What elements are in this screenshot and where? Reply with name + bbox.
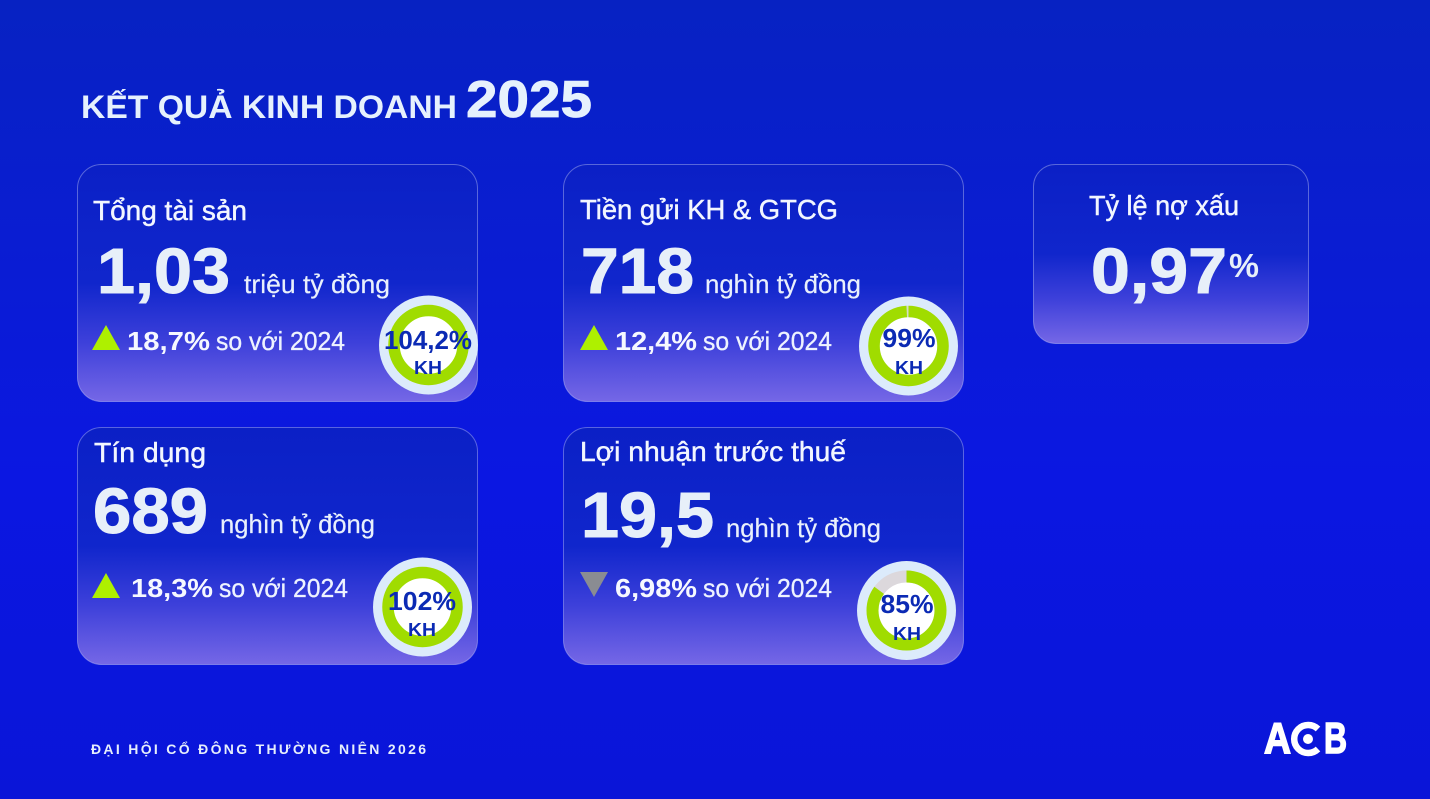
donut: 85% KH: KH <box>893 624 921 644</box>
growth text <box>131 573 348 603</box>
donut: 102% KH: 102% <box>388 586 456 616</box>
panel: Tỷ lệ nợ xấu <box>1034 164 1308 344</box>
value: 0,97 <box>1091 235 1227 307</box>
growth text: 18,3% <box>131 573 213 603</box>
growth text: 6,98% <box>615 573 697 603</box>
unit: nghìn tỷ đồng <box>726 513 881 543</box>
donut: 104,2% KH: 104,2% <box>384 325 472 355</box>
title <box>81 71 592 129</box>
title: KẾT QUẢ KINH DOANH <box>81 89 457 125</box>
value: 718 <box>581 235 694 307</box>
heading: Tiền gửi KH & GTCG <box>580 194 838 225</box>
donut: 102% KH: KH <box>408 620 436 640</box>
donut: 99% KH <box>859 296 958 396</box>
value: 19,5 <box>581 479 714 551</box>
donut: 102% KH <box>373 558 472 656</box>
heading: Tín dụng <box>94 437 206 468</box>
unit: nghìn tỷ đồng <box>220 509 375 539</box>
heading: Tổng tài sản <box>93 195 247 226</box>
heading: Lợi nhuận trước thuế <box>580 436 846 467</box>
value: 689 <box>93 475 208 547</box>
value: 1,03 <box>97 235 230 307</box>
heading: Tỷ lệ nợ xấu <box>1089 190 1239 221</box>
icon: up triangle <box>92 573 120 598</box>
donut: 99% KH: KH <box>895 358 923 378</box>
logo: ACB: A <box>1264 714 1291 763</box>
panel: Tổng tài sản <box>78 164 478 402</box>
unit: nghìn tỷ đồng <box>705 269 861 299</box>
donut: 104,2% KH <box>379 296 478 394</box>
donut: 104,2% KH: KH <box>414 358 442 378</box>
growth text <box>615 326 832 356</box>
growth text: 18,7% <box>127 326 210 356</box>
percent sign: % <box>1229 247 1259 284</box>
growth text: so với 2024 <box>703 573 832 603</box>
donut: 85% KH: 85% <box>880 589 934 619</box>
unit: triệu tỷ đồng <box>244 269 390 299</box>
icon: down triangle <box>580 572 608 597</box>
growth text <box>615 573 832 603</box>
logo: ACB: B <box>1324 714 1347 763</box>
growth text: so với 2024 <box>703 326 832 356</box>
logo: ACB <box>1264 714 1347 763</box>
panel: Lợi nhuận trước thuế <box>564 428 964 664</box>
panel: Tiền gửi KH & GTCG <box>564 164 964 402</box>
icon: up triangle <box>580 325 608 350</box>
growth text: so với 2024 <box>216 326 345 356</box>
growth text <box>127 326 345 356</box>
panel: Tín dụng <box>78 428 478 664</box>
icon: up triangle <box>92 325 120 350</box>
growth text: so với 2024 <box>219 573 348 603</box>
footer text: ĐẠI HỘI CỔ ĐÔNG THƯỜNG NIÊN 2026 <box>91 740 426 757</box>
donut: 99% KH: 99% <box>882 323 936 353</box>
donut: 85% KH <box>857 561 956 660</box>
title: 2025 <box>466 71 592 129</box>
growth text: 12,4% <box>615 326 697 356</box>
